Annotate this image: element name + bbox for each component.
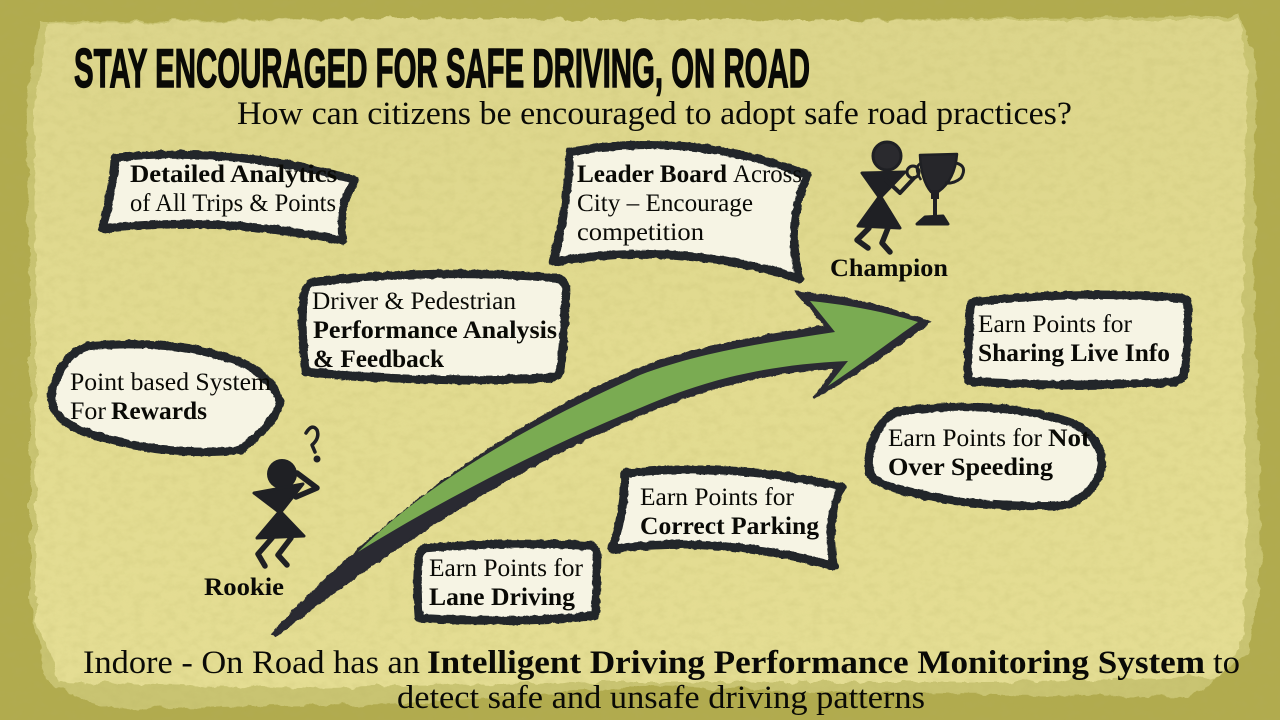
- footer text: to: [1213, 645, 1240, 681]
- panel: performance analysis: Driver & Pedestrian: [312, 288, 516, 315]
- footer text: detect safe and unsafe driving patterns: [397, 680, 925, 716]
- panel: point based system: For: [70, 398, 107, 425]
- label: champion: Champion: [830, 255, 948, 282]
- footer text: Intelligent Driving Performance Monitoring System: [427, 645, 1205, 681]
- footer text: Indore - On Road has an: [83, 645, 420, 681]
- panel: detailed analytics: Detailed Analytics: [130, 161, 337, 188]
- panel: lane driving: Lane Driving: [429, 584, 576, 611]
- panel: correct parking: Correct Parking: [640, 513, 820, 540]
- panel: over speeding: [869, 407, 1102, 506]
- panel: leader board: Leader Board: [577, 161, 727, 188]
- icon: rookie figure with question mark: [254, 427, 320, 566]
- arrow: rising green progress arrow: [272, 292, 930, 636]
- panel: performance analysis: [302, 274, 566, 380]
- panel: correct parking: [612, 470, 842, 566]
- panel: leader board: [553, 145, 808, 279]
- panel: over speeding: Not: [1048, 425, 1091, 452]
- panel: sharing live info: Sharing Live Info: [978, 340, 1170, 367]
- panel: performance analysis: & Feedback: [313, 346, 444, 373]
- panel: sharing live info: Earn Points for: [978, 311, 1133, 338]
- panel: correct parking: Earn Points for: [640, 484, 795, 511]
- icon: champion figure with trophy: [857, 142, 964, 252]
- panel: detailed analytics: [102, 154, 355, 241]
- panel: over speeding: Earn Points for: [888, 425, 1043, 452]
- panel: point based system: [51, 344, 280, 452]
- panel: leader board: competition: [577, 219, 705, 246]
- panel: over speeding: Over Speeding: [888, 454, 1054, 481]
- panel: lane driving: Earn Points for: [429, 555, 584, 582]
- panel: point based system: Rewards: [111, 398, 207, 425]
- label: rookie: Rookie: [204, 574, 284, 601]
- panel: sharing live info: [968, 295, 1188, 385]
- panel: point based system: Point based System: [70, 369, 272, 396]
- subtitle: How can citizens be encouraged to adopt safe road practices?: [237, 96, 1072, 132]
- panel: lane driving: [418, 544, 597, 621]
- panel: performance analysis: Performance Analysis: [313, 317, 557, 344]
- footer text: [83, 645, 1240, 716]
- panel: leader board: City – Encourage: [577, 190, 753, 217]
- panel: leader board: Across: [733, 161, 802, 188]
- panel: detailed analytics: of All Trips & Points: [130, 190, 336, 217]
